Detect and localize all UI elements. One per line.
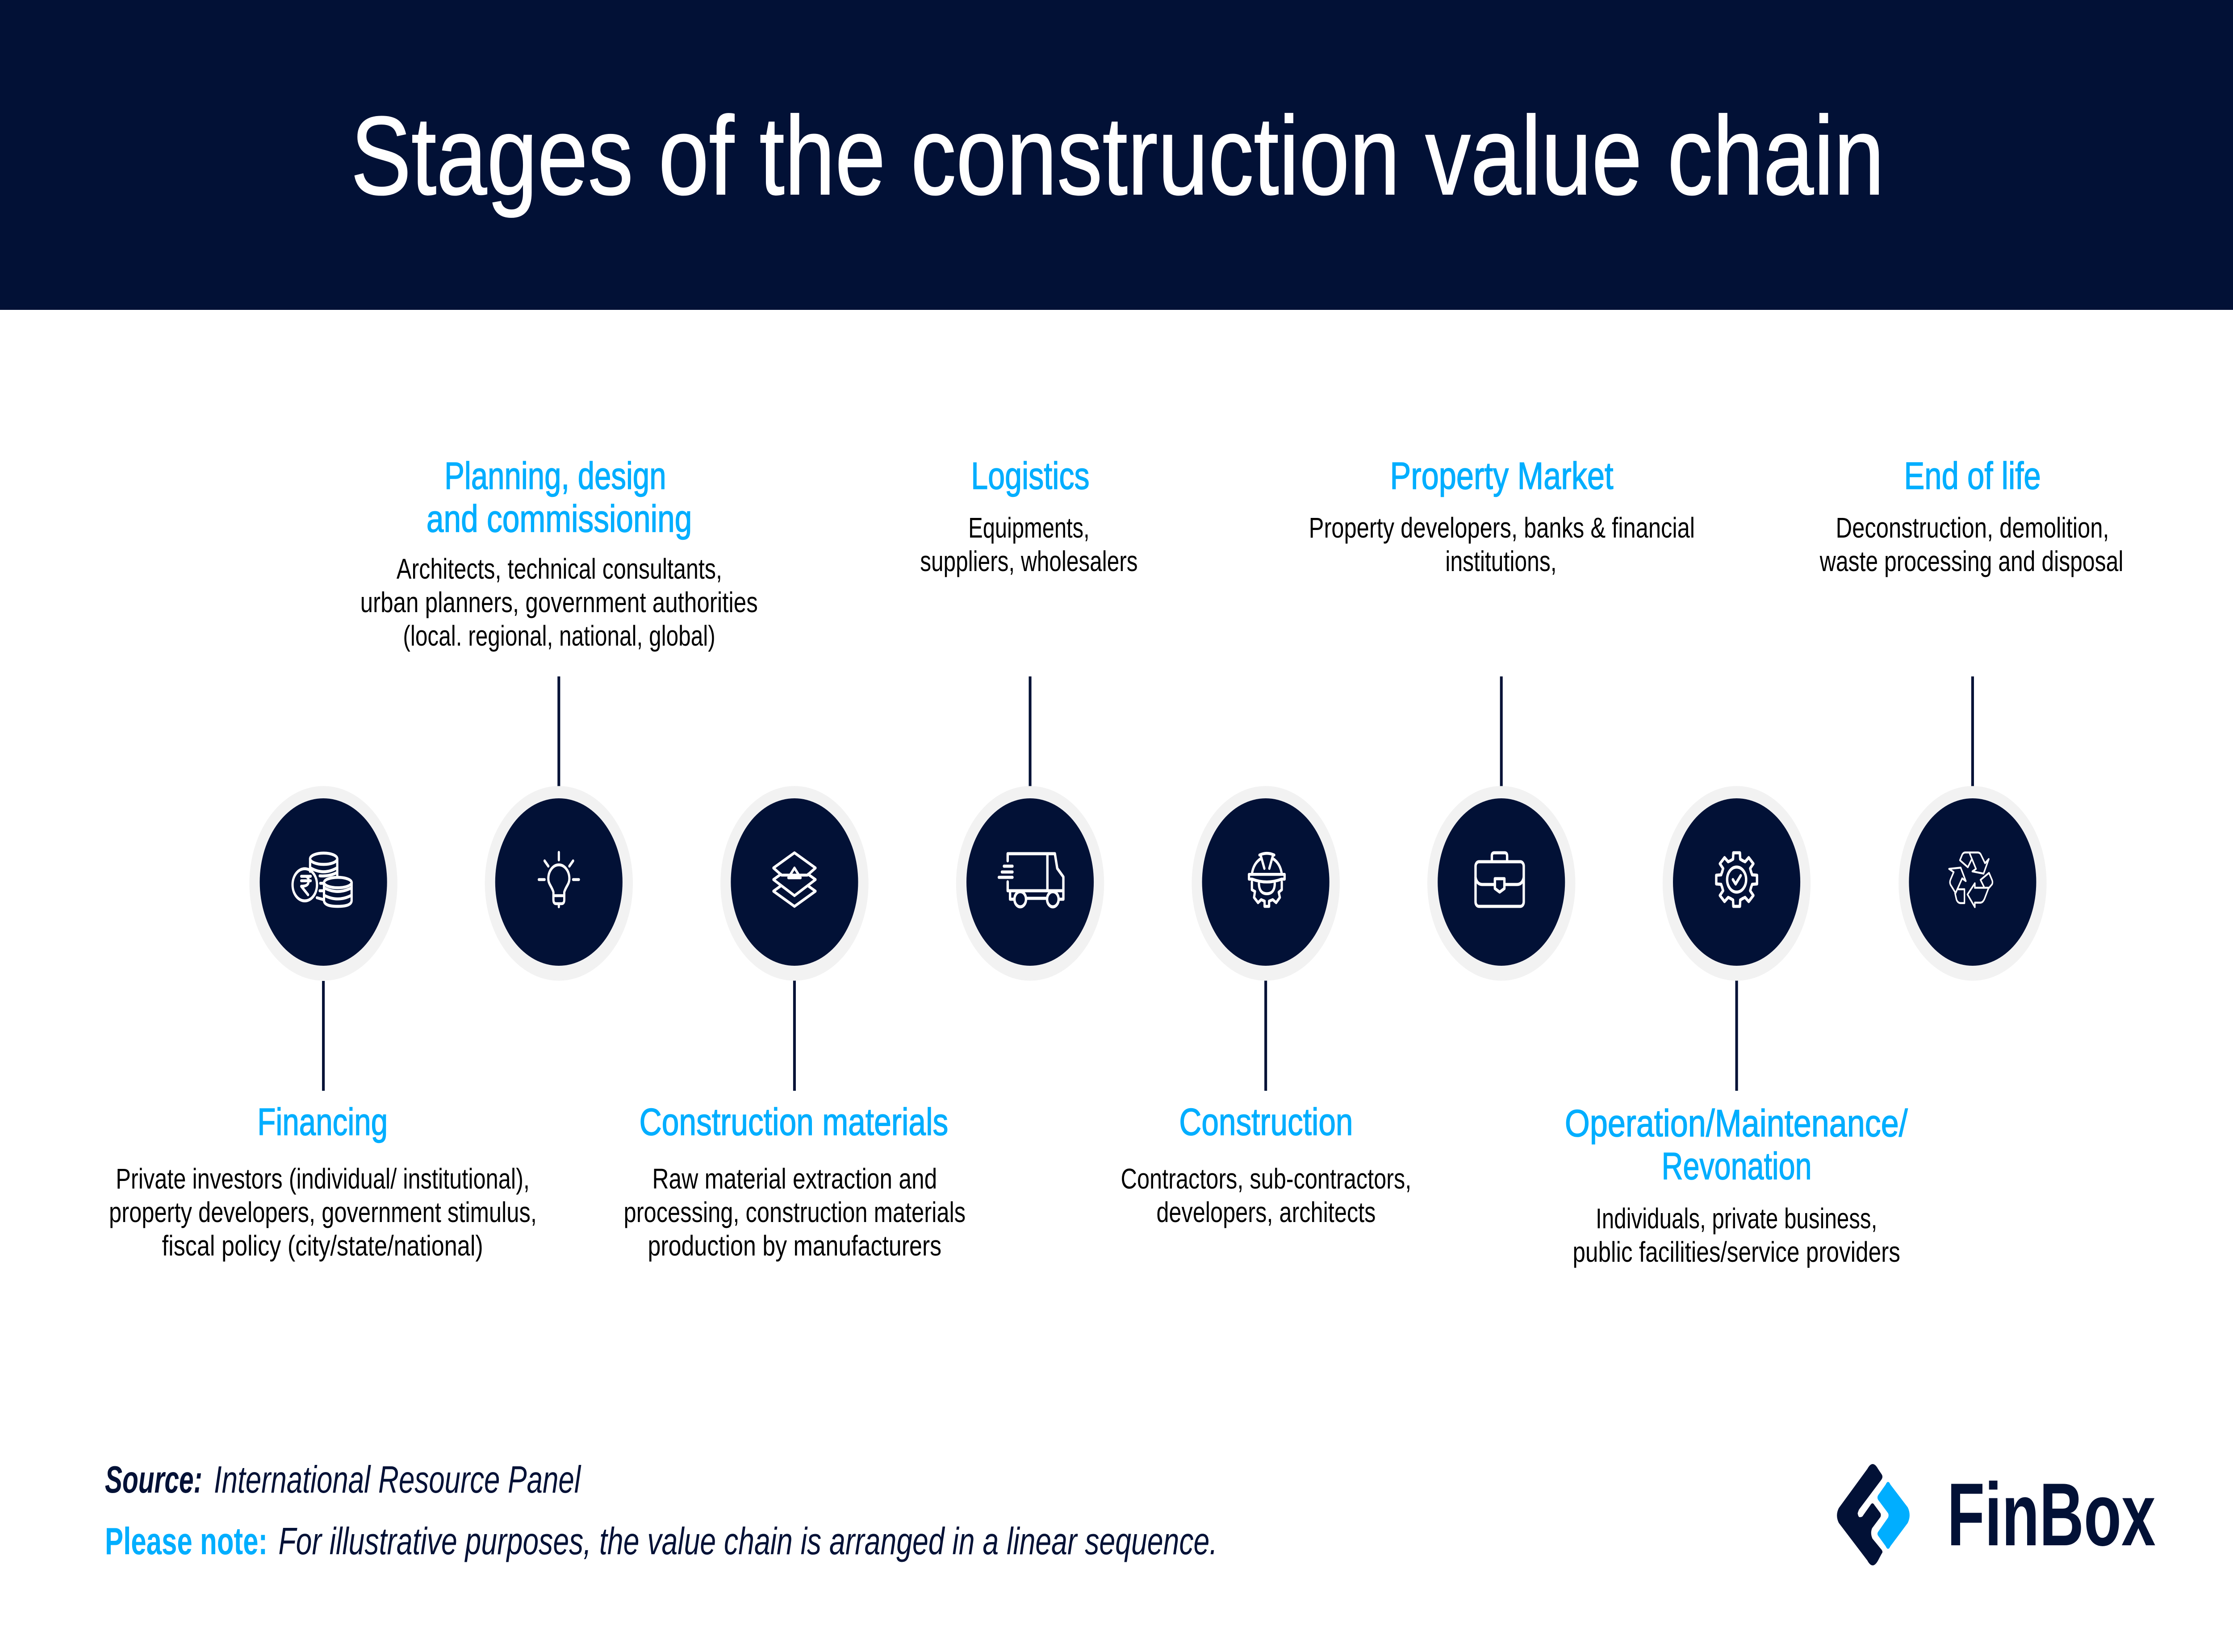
- logo mark: [1837, 1464, 1910, 1565]
- source note: International Resource Panel: [214, 1458, 581, 1501]
- stage: Property Market: [1309, 455, 1695, 981]
- heading: Property Market: [1390, 455, 1614, 497]
- icon: delivery truck: [999, 854, 1063, 907]
- icon: gear with check: [1716, 853, 1757, 906]
- icon: recycle arrows: [1949, 852, 1992, 907]
- heading: [1565, 1102, 1908, 1187]
- node circle: [956, 786, 1104, 980]
- heading: Logistics: [971, 455, 1090, 497]
- description: [1572, 1203, 1900, 1268]
- icon: briefcase: [1476, 853, 1524, 906]
- description: [624, 1164, 966, 1262]
- stage: Logistics: [920, 455, 1138, 981]
- stage: Operation/Maintenance/Revonation: [1565, 786, 1908, 1268]
- description: Architects, technical consultants,: [397, 554, 722, 585]
- description: Contractors, sub-contractors,: [1121, 1164, 1411, 1195]
- connector line: [1500, 676, 1503, 799]
- description: production by manufacturers: [648, 1231, 941, 1262]
- connector line: [1735, 966, 1738, 1091]
- description: Deconstruction, demolition,: [1836, 513, 2109, 544]
- heading: End of life: [1904, 455, 2041, 497]
- description: Private investors (individual/ institutional),: [116, 1164, 530, 1195]
- stage: End of life: [1819, 455, 2123, 981]
- description: property developers, government stimulus,: [109, 1197, 537, 1229]
- description: [1121, 1164, 1411, 1229]
- title: Stages of the construction value chain: [351, 94, 1884, 218]
- description: [920, 513, 1138, 578]
- icon: coins with rupee: [293, 853, 351, 906]
- description: [109, 1164, 537, 1262]
- stage: Financing: [109, 786, 537, 1262]
- logo wordmark: FinBox: [1947, 1464, 2156, 1564]
- description: Equipments,: [968, 513, 1090, 544]
- description: urban planners, government authorities: [360, 587, 758, 619]
- heading: Financing: [257, 1101, 388, 1143]
- description: Property developers, banks & financial: [1309, 513, 1695, 544]
- connector line: [1264, 966, 1267, 1091]
- connector line: [1029, 676, 1032, 799]
- please note: Please note:: [105, 1520, 268, 1562]
- icon: light bulb: [539, 852, 579, 907]
- node circle: [1192, 786, 1340, 980]
- heading: Revonation: [1662, 1145, 1812, 1187]
- description: fiscal policy (city/state/national): [162, 1231, 483, 1262]
- heading: Construction materials: [640, 1101, 948, 1143]
- please note: For illustrative purposes, the value chain is arranged in a linear sequence.: [278, 1520, 1217, 1562]
- node circle: [1427, 786, 1575, 980]
- description: developers, architects: [1156, 1197, 1376, 1229]
- description: [1309, 513, 1695, 578]
- stage: Construction: [1121, 786, 1411, 1229]
- heading: [427, 455, 692, 540]
- header band with title: [0, 0, 2233, 310]
- description: (local. regional, national, global): [403, 621, 715, 652]
- node circle: [249, 786, 397, 980]
- FinBox logo: [1837, 1464, 2156, 1565]
- heading: Operation/Maintenance/: [1565, 1102, 1908, 1144]
- description: Individuals, private business,: [1596, 1203, 1877, 1235]
- source note: Source:: [105, 1458, 202, 1501]
- heading: and commissioning: [427, 497, 692, 540]
- stage: Construction materials: [624, 786, 966, 1262]
- node circle: [1898, 786, 2047, 980]
- heading: Planning, design: [444, 455, 666, 497]
- icon: hard hat and gear: [1249, 853, 1284, 906]
- connector line: [322, 981, 325, 1091]
- node circle: [1663, 786, 1811, 980]
- description: waste processing and disposal: [1819, 546, 2123, 578]
- description: suppliers, wholesalers: [920, 546, 1138, 578]
- stage: Planning, design and commissioning: [360, 455, 758, 981]
- connector line: [1971, 676, 1974, 799]
- description: public facilities/service providers: [1572, 1237, 1900, 1268]
- description: institutions,: [1445, 546, 1557, 578]
- node circle: [485, 786, 633, 980]
- description: [1819, 513, 2123, 578]
- connector line: [557, 676, 560, 799]
- connector line: [793, 966, 796, 1091]
- node circle: [720, 786, 869, 980]
- description: [360, 554, 758, 652]
- description: processing, construction materials: [624, 1197, 966, 1229]
- description: Raw material extraction and: [652, 1164, 937, 1195]
- heading: Construction: [1179, 1101, 1353, 1143]
- icon: stacked layers: [774, 853, 815, 906]
